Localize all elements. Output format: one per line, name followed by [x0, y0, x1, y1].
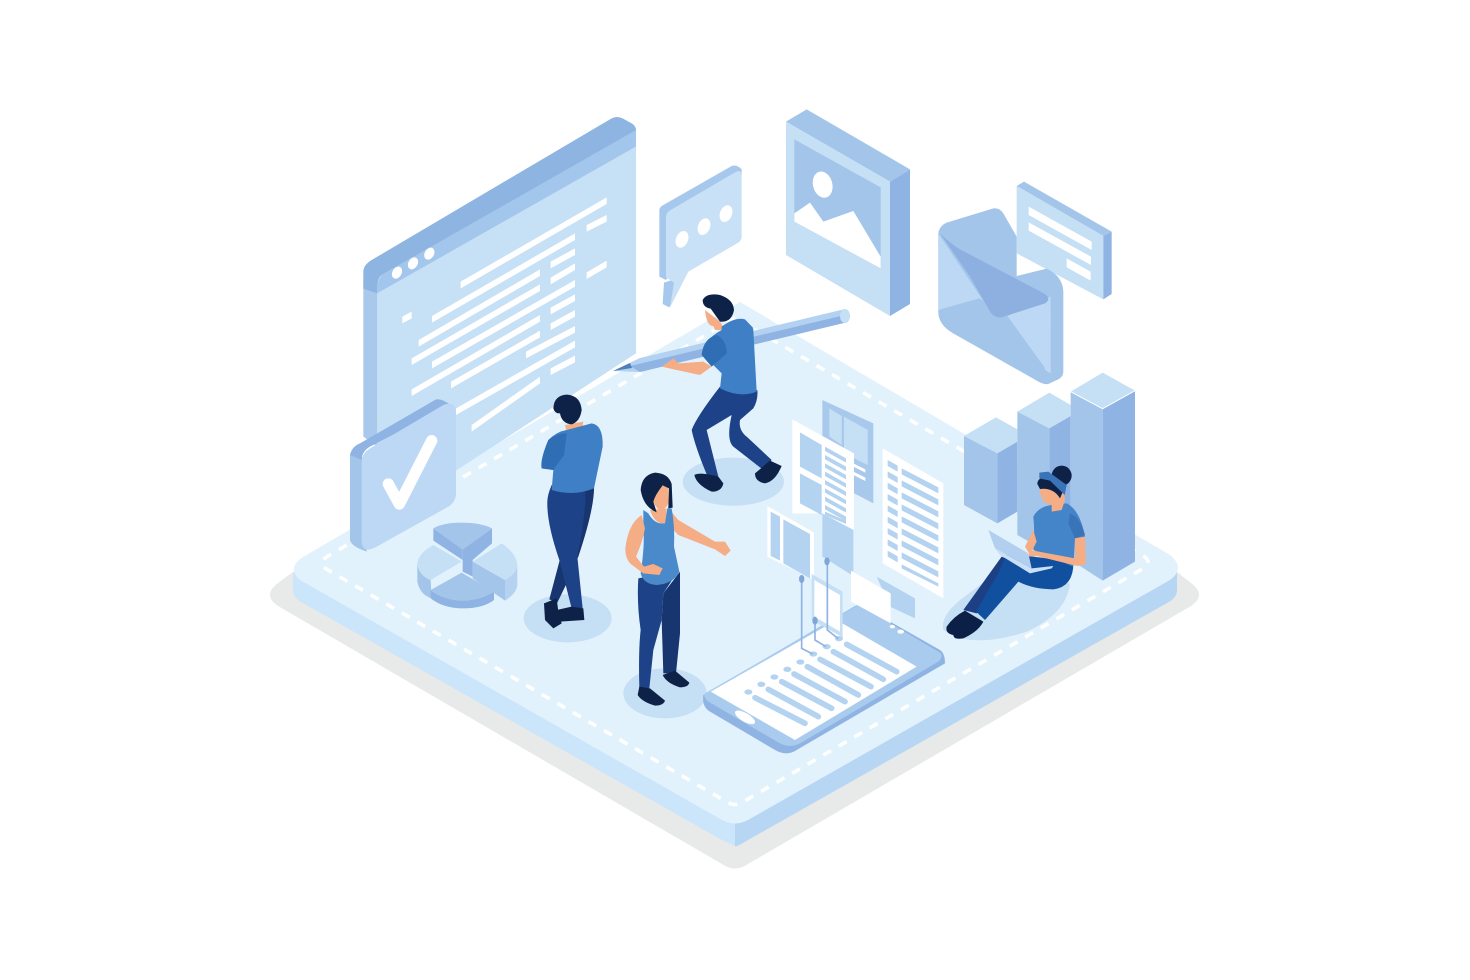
floating documents and phone — [703, 400, 945, 753]
document: back window — [822, 400, 873, 503]
document: right table — [883, 448, 943, 598]
connector lines — [802, 560, 838, 654]
arm: outstretched — [670, 510, 731, 556]
person: standing man with crossed arms — [524, 395, 612, 642]
bar: tall — [1071, 373, 1135, 581]
code lines — [402, 197, 607, 432]
document: small floating cards — [812, 571, 915, 637]
bar: medium — [1017, 393, 1071, 553]
document: left panel — [767, 506, 814, 580]
pen — [613, 309, 850, 372]
bar: short — [964, 417, 1017, 523]
dashed border — [322, 318, 1148, 804]
isometric platform — [293, 302, 1178, 846]
person: man carrying pen — [662, 294, 784, 506]
envelope silhouette — [938, 208, 1063, 384]
phone list rows — [755, 644, 897, 723]
pie chart — [417, 523, 517, 608]
icon: envelope — [938, 208, 1063, 384]
person: seated woman with laptop — [943, 466, 1086, 640]
phone — [703, 605, 945, 753]
panel: browser window — [363, 117, 636, 513]
icon: check mark card — [350, 399, 456, 552]
arm: on hip — [625, 515, 663, 575]
icon: picture frame — [786, 109, 910, 316]
icon: speech bubble — [659, 165, 742, 307]
window control dots — [390, 246, 437, 280]
platform shadow — [270, 572, 1199, 868]
person: standing woman — [623, 473, 731, 718]
icon: message document — [1017, 182, 1112, 299]
document: center layout — [792, 419, 854, 576]
bar chart — [964, 373, 1135, 581]
